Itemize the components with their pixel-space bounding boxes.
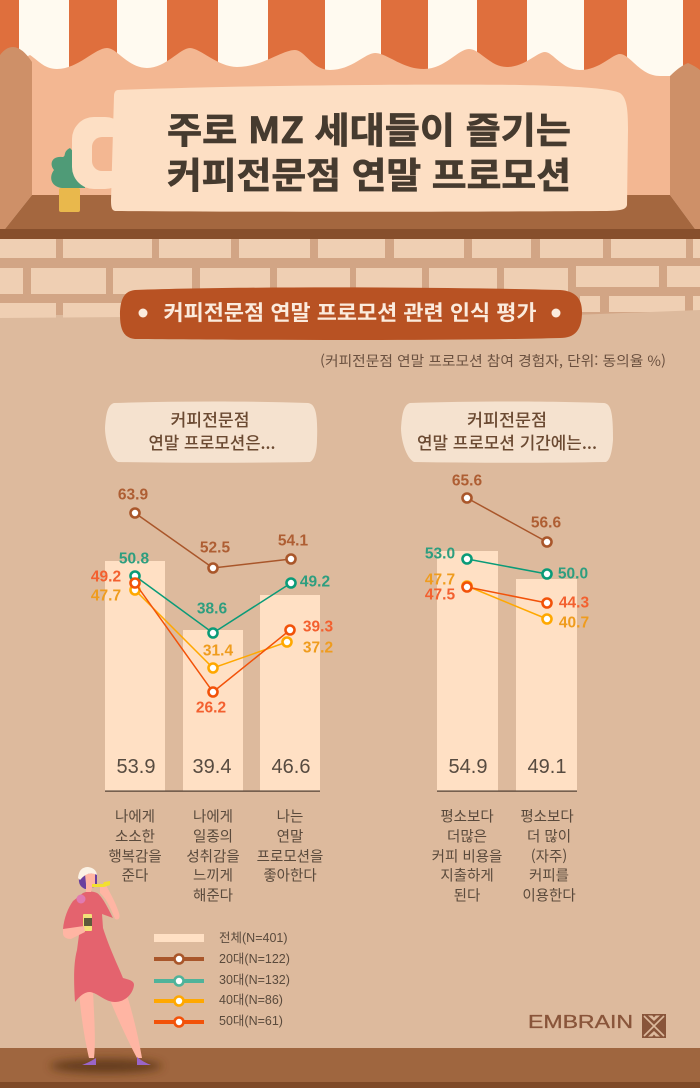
icon: potted plant bbox=[51, 148, 85, 212]
bars: overall: 49.1 bbox=[528, 756, 566, 778]
series: 50s: 49.2 bbox=[91, 568, 121, 586]
right chart heading bubble: 연말 프로모션 기간에는... bbox=[417, 429, 597, 454]
category label: use more often: 커피를 bbox=[529, 864, 569, 886]
section heading pill: 커피전문점 연말 프로모션 관련 인식 평가 bbox=[164, 297, 536, 327]
category label: achievement: 나에게 bbox=[193, 806, 233, 826]
series: 30s: 49.2 bbox=[300, 574, 330, 590]
category label: like promotions: 나는 bbox=[277, 806, 303, 826]
category label: achievement: 성취감을 bbox=[186, 846, 240, 866]
category label: like promotions: 프로모션을 bbox=[257, 846, 323, 866]
floor bbox=[0, 1048, 700, 1088]
category label: like promotions: 연말 bbox=[277, 826, 303, 846]
icon: Embrain mark bbox=[642, 1014, 666, 1038]
left chart bbox=[91, 486, 333, 792]
series: 30s bbox=[425, 546, 588, 582]
left chart heading bubble bbox=[105, 402, 317, 463]
bars: overall: 54.9 bbox=[449, 756, 487, 778]
category label: spend more: 평소보다 bbox=[440, 806, 494, 826]
series: 50s bbox=[91, 568, 333, 716]
series: 40s: 31.4 bbox=[203, 642, 233, 660]
category label: use more often: 이용한다 bbox=[522, 884, 576, 906]
series: 20s bbox=[118, 486, 308, 572]
series: 50s: 26.2 bbox=[196, 700, 226, 716]
bars: overall: 46.6 bbox=[272, 756, 310, 778]
illustration: woman with coffee bbox=[50, 867, 162, 1073]
series: 40s: 47.7 bbox=[91, 588, 121, 604]
bars: overall: 39.4 bbox=[193, 756, 231, 778]
series: 30s: 50.8 bbox=[119, 550, 149, 568]
legend: 50대(N=61) bbox=[219, 1014, 283, 1028]
category label: spend more: 더많은 bbox=[447, 826, 487, 846]
series: 40s bbox=[91, 586, 333, 672]
series: 20s: 63.9 bbox=[118, 486, 148, 504]
legend: 30대(N=132) bbox=[219, 973, 290, 987]
shop shelf bbox=[0, 195, 700, 239]
bars: overall: 53.9 bbox=[117, 756, 155, 778]
brand logo: Embrain: EMBRAIN bbox=[528, 1012, 633, 1032]
title text: 주로 MZ 세대들이 즐기는 bbox=[167, 102, 571, 154]
left chart heading bubble: 커피전문점 bbox=[170, 406, 250, 431]
category label: use more often: (자주) bbox=[531, 846, 567, 866]
series: 20s: 56.6 bbox=[531, 514, 561, 532]
series: 40s bbox=[425, 572, 589, 632]
series: 30s: 50.0 bbox=[558, 566, 588, 582]
series: 20s: 52.5 bbox=[200, 540, 230, 556]
left chart heading bubble: 연말 프로모션은... bbox=[148, 429, 276, 454]
series: 20s: 65.6 bbox=[452, 472, 482, 490]
title text: 커피전문점 연말 프로모션 bbox=[167, 147, 571, 199]
left column bbox=[0, 47, 32, 229]
category label: achievement: 해준다 bbox=[193, 884, 233, 906]
series: 50s: 47.5 bbox=[425, 586, 455, 604]
category label: spend more: 커피 비용을 bbox=[432, 846, 502, 866]
series: 30s bbox=[119, 550, 330, 638]
bars: overall bbox=[105, 561, 320, 792]
shop wall with scalloped edge bbox=[0, 48, 700, 200]
right chart bbox=[425, 472, 589, 792]
series: 50s bbox=[425, 582, 589, 612]
legend bbox=[154, 931, 290, 1028]
legend: 전체(N=401) bbox=[219, 931, 288, 945]
category label: small happiness: 행복감을 bbox=[108, 846, 162, 866]
legend: 40대(N=86) bbox=[219, 993, 283, 1007]
series: 50s: 44.3 bbox=[559, 594, 589, 612]
category label: use more often bbox=[520, 806, 576, 906]
section heading pill bbox=[120, 287, 582, 340]
category label: achievement: 느끼게 bbox=[193, 864, 233, 886]
brick wall bbox=[0, 239, 700, 330]
title card bbox=[111, 85, 628, 212]
series: 40s: 47.7 bbox=[425, 572, 455, 588]
category label: achievement bbox=[186, 806, 240, 906]
right column bbox=[670, 63, 700, 229]
category label: like promotions: 좋아한다 bbox=[263, 864, 317, 886]
legend: 20대(N=122) bbox=[219, 952, 290, 966]
icon: mug handle bbox=[72, 117, 127, 189]
category label: spend more: 된다 bbox=[454, 884, 480, 906]
category label: like promotions bbox=[257, 806, 323, 886]
series: 40s: 37.2 bbox=[303, 640, 333, 656]
brand logo: Embrain bbox=[528, 1012, 666, 1038]
right chart heading bubble bbox=[401, 402, 613, 463]
category label: use more often: 평소보다 bbox=[520, 806, 574, 826]
category label: small happiness: 준다 bbox=[122, 864, 148, 886]
category label: use more often: 더 많이 bbox=[527, 826, 571, 846]
series: 20s: 54.1 bbox=[278, 532, 308, 550]
category label: small happiness: 나에게 bbox=[115, 806, 155, 826]
category label: small happiness: 소소한 bbox=[115, 826, 155, 846]
series: 20s bbox=[452, 472, 561, 546]
title text bbox=[167, 102, 571, 199]
series: 30s: 38.6 bbox=[197, 600, 227, 618]
bars: overall bbox=[437, 551, 577, 792]
series: 30s: 53.0 bbox=[425, 546, 455, 562]
right chart heading bubble: 커피전문점 bbox=[467, 406, 547, 431]
awning bbox=[0, 0, 700, 100]
category label: spend more bbox=[432, 806, 502, 906]
survey note: (커피전문점 연말 프로모션 참여 경험자, 단위: 동의율 %) bbox=[320, 351, 666, 371]
series: 40s: 40.7 bbox=[559, 614, 589, 632]
category label: achievement: 일종의 bbox=[193, 826, 233, 846]
category label: small happiness bbox=[108, 806, 162, 886]
category label: spend more: 지출하게 bbox=[440, 864, 494, 886]
series: 50s: 39.3 bbox=[303, 618, 333, 636]
